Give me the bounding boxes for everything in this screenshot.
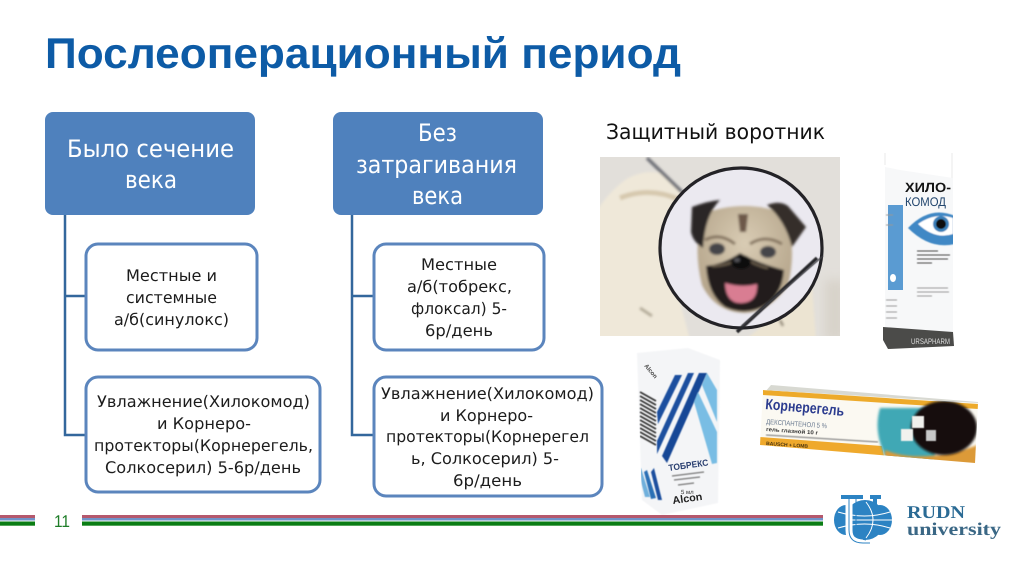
product: Korneregel tube box: Корнерегель: [765, 396, 845, 420]
panel: moisturising and corneal protectors middle: Увлажнение(Хилокомод): [381, 384, 594, 403]
product: Hilo-Komod drops box: КОМОД: [905, 195, 946, 209]
panel: eyelid was cut heading: [45, 112, 255, 215]
product: Hilo-Komod drops box: URSAPHARM: [911, 337, 950, 346]
product: Hilo-Komod drops box: ХИЛО-: [905, 180, 951, 195]
panel: without eyelid involvement heading: [333, 112, 543, 215]
footer rule left: [0, 515, 35, 526]
panel: moisturising and corneal protectors middle: [374, 377, 602, 496]
panel: moisturising and corneal protectors middle: ь, Солкосерил) 5-: [411, 449, 559, 468]
panel: moisturising and corneal protectors middle: протекторы(Корнерегел: [386, 427, 589, 446]
panel: moisturising and corneal protectors left: [86, 377, 320, 492]
product: Hilo-Komod drops box: [883, 153, 955, 350]
icon: globe and U emblem: [834, 497, 892, 543]
panel: local antibiotics: а/б(тобрекс,: [407, 277, 512, 296]
product: Korneregel tube box: ДЕКСПАНТЕНОЛ 5 %: [766, 419, 827, 430]
panel: local antibiotics: Местные: [421, 255, 497, 274]
page number: 11: [54, 512, 70, 531]
product: Tobrex box: Alcon: [642, 363, 659, 380]
product: Tobrex box: 5 мл: [681, 489, 694, 496]
panel: eyelid was cut heading: Было сечение: [67, 135, 234, 163]
caption: protective collar: Защитный воротник: [606, 120, 825, 144]
product: Korneregel tube box: [760, 385, 978, 470]
panel: local antibiotics: 6р/день: [425, 321, 493, 340]
product: Tobrex box: Alcon: [672, 491, 703, 507]
photo: pug in protective collar: [596, 157, 845, 340]
logo: RUDN university: RUDN: [907, 502, 965, 522]
panel: moisturising and corneal protectors left: Солкосерил) 5-6р/день: [105, 458, 301, 477]
panel: local and systemic antibiotics: [86, 244, 257, 350]
logo: RUDN university: university: [907, 519, 1001, 539]
connector: middle tree: [352, 215, 374, 435]
panel: moisturising and corneal protectors middle: и Корнеро-: [440, 406, 533, 425]
panel: moisturising and corneal protectors left: протекторы(Корнерегель,: [94, 436, 313, 455]
product: Korneregel tube box: гель глазной 10 г: [766, 426, 819, 437]
panel: without eyelid involvement heading: Без: [418, 119, 457, 147]
product: Korneregel tube box: BAUSCH + LOMB: [766, 441, 809, 450]
panel: local and systemic antibiotics: а/б(синулокс): [114, 310, 229, 329]
panel: without eyelid involvement heading: века: [412, 182, 463, 210]
panel: local antibiotics: флоксал) 5-: [411, 299, 507, 318]
panel: eyelid was cut heading: века: [125, 166, 177, 194]
logo: RUDN university: [834, 497, 1001, 543]
panel: moisturising and corneal protectors left: Увлажнение(Хилокомод): [97, 392, 310, 411]
product: Tobrex box: ТОБРЕКС: [668, 457, 709, 473]
title: Послеоперационный период: [45, 30, 681, 78]
panel: local antibiotics: [374, 244, 544, 350]
product: Tobrex box: [637, 348, 720, 515]
panel: local and systemic antibiotics: системные: [126, 288, 217, 307]
panel: moisturising and corneal protectors left: и Корнеро-: [157, 414, 251, 433]
connector: left tree: [65, 215, 86, 435]
icon: drop: [890, 274, 896, 282]
panel: moisturising and corneal protectors middle: 6р/день: [453, 471, 522, 490]
panel: local and systemic antibiotics: Местные и: [126, 266, 217, 285]
panel: without eyelid involvement heading: затрагивания: [356, 151, 517, 179]
footer rule right: [82, 515, 823, 526]
